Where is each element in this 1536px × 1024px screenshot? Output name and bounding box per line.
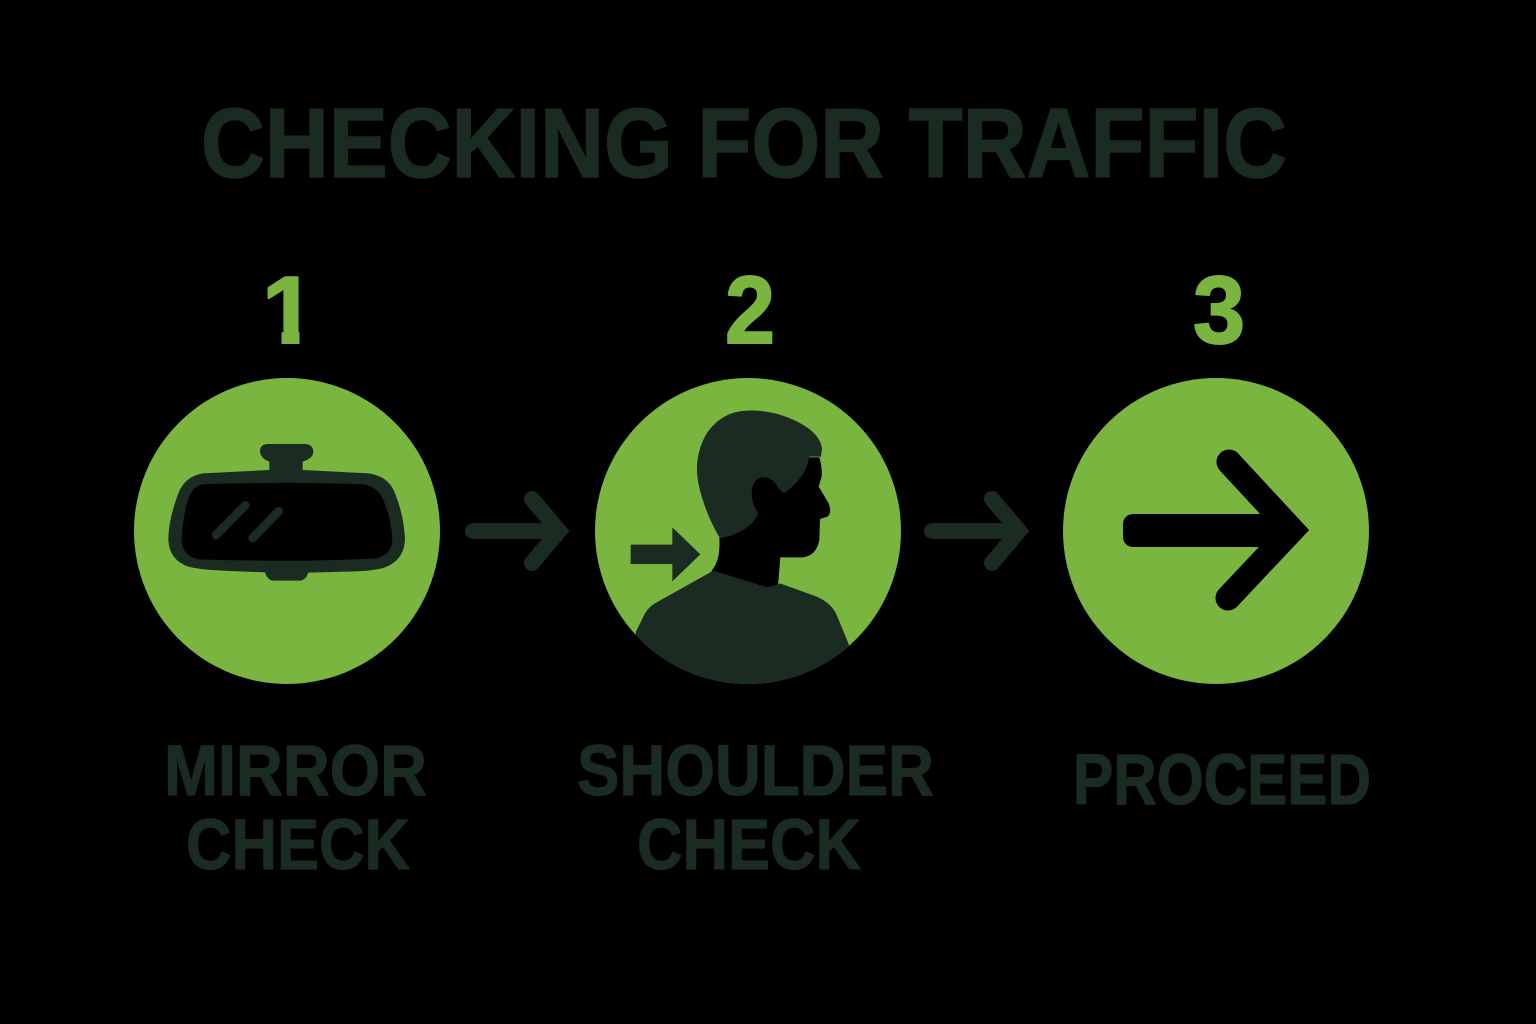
icon: forward arrow bbox=[1123, 462, 1293, 598]
body bbox=[636, 570, 849, 684]
icon: person looking over shoulder bbox=[630, 410, 849, 684]
mirror glare lines bbox=[216, 505, 279, 538]
step 3 circle: proceed icon bbox=[1063, 378, 1369, 684]
label: mirror check: CHECK bbox=[186, 806, 410, 885]
label: mirror check bbox=[164, 732, 427, 885]
label: shoulder check: SHOULDER bbox=[577, 732, 934, 811]
label: proceed: PROCEED bbox=[1073, 741, 1371, 820]
step 1 circle: mirror icon bbox=[134, 378, 440, 684]
title: CHECKING FOR TRAFFIC bbox=[201, 88, 1287, 198]
label: mirror check: MIRROR bbox=[164, 732, 427, 811]
step 1 number: 1 bbox=[262, 257, 315, 364]
step 2 circle: shoulder check icon bbox=[595, 378, 901, 703]
arrow: step 1 to step 2 bbox=[473, 499, 559, 563]
label: shoulder check: CHECK bbox=[637, 806, 861, 885]
step 3 number: 3 bbox=[1193, 257, 1245, 364]
step 2 number: 2 bbox=[725, 257, 775, 364]
icon: rear-view mirror bbox=[168, 444, 405, 581]
pointer arrow bbox=[631, 527, 700, 581]
arrow: step 2 to step 3 bbox=[932, 499, 1019, 563]
hair bbox=[697, 411, 822, 538]
face and neck bbox=[710, 457, 830, 597]
label: shoulder check bbox=[577, 732, 934, 885]
